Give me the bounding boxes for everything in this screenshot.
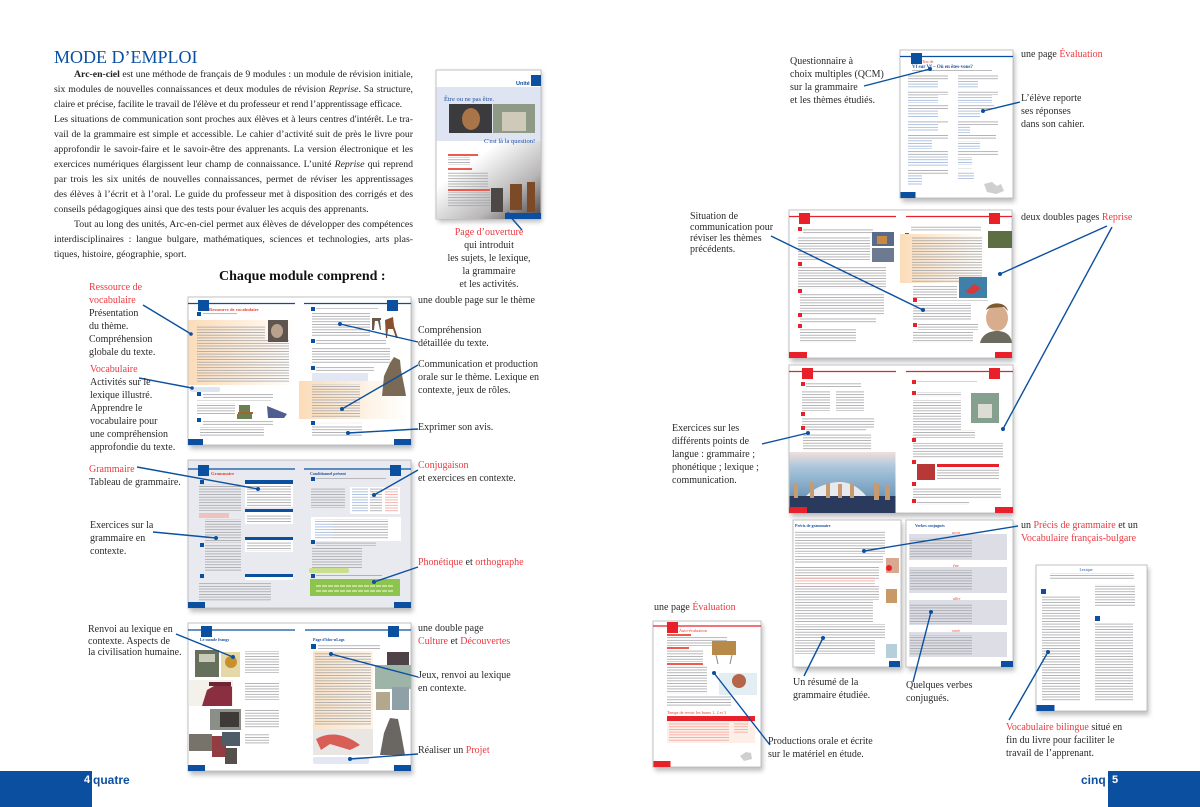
callout: grammaire (89, 464, 181, 488)
intro text block: interdisciplinaires : langue bulgare, mathématiques, sciences et technologies, arts plas- (54, 234, 413, 245)
callout: questionnaire: sur la grammaire (790, 82, 858, 93)
arrow: reprise 1 (1000, 226, 1107, 274)
heading: chaque module comprend: Chaque module comprend : (219, 269, 386, 284)
callout: situation de communication: réviser les thèmes (690, 233, 762, 244)
thumbnail: QCM evaluation page: Test de (922, 59, 934, 64)
dialogue panel (900, 234, 986, 283)
boy photo (986, 305, 1008, 331)
intro text block: approfondir le savoir-faire et le savoir-être des apprenants. La version électronique et les (54, 144, 413, 155)
callout: productions (768, 736, 873, 760)
callout: vocabulaire: Vocabulaire (90, 364, 138, 375)
collage photos (195, 650, 219, 677)
callout: vocabulaire: approfondie du texte. (90, 442, 175, 453)
train and timetable (917, 464, 935, 480)
callout: communication: contexte, jeux de rôles. (418, 385, 510, 396)
thumbnail: conjugated verbs page: être (953, 563, 959, 568)
callout: vocabulaire: lexique illustré. (90, 390, 152, 401)
callout: communication: Communication et production (418, 359, 538, 370)
callout: jeux: Jeux, renvoi au lexique (418, 670, 511, 681)
callout: vocabulaire: une compréhension (90, 429, 168, 440)
intro text block: exercices numériques élargissent leur champ de connaissance. L’unité Reprise qui reprend (54, 159, 413, 170)
callout: quelques verbes: conjugués. (906, 693, 949, 704)
arrow: productions (714, 673, 770, 745)
arrow: situation (771, 236, 923, 310)
callout: grammaire: Grammaire (89, 464, 135, 475)
arrow: vocabulaire bilingue (1009, 652, 1048, 720)
thumbnail: grammar summary page (793, 520, 903, 671)
thumbnail: culture double page: Le monde frangy (200, 637, 229, 642)
page label: quatre: quatre (93, 773, 130, 787)
callout: exercices points de langue: communication. (672, 475, 737, 486)
callout: jeux: en contexte. (418, 683, 466, 694)
callout: résumé: grammaire étudiée. (793, 690, 870, 701)
callout: ressource de vocabulaire: vocabulaire (89, 295, 136, 306)
footer bar: right page number (1108, 771, 1200, 807)
thumbnail: opening page: Unité (516, 81, 530, 87)
callout: productions: sur le matériel en étude. (768, 749, 864, 760)
callout: exercices grammaire: Exercices sur la (90, 520, 153, 531)
callout: exercices grammaire: grammaire en (90, 533, 145, 544)
arrow: verbes (913, 612, 931, 682)
callout: exercices points de langue: phonétique ; lexique ; (672, 462, 759, 473)
intro text block: tiques, histoire, géographie, sport. (54, 249, 186, 260)
callout: renvoi au lexique: contexte. Aspects de (88, 636, 170, 646)
callout: vocabulaire bilingue (1006, 722, 1122, 759)
thumbnail: grammar double page: Conditionnel présent (310, 471, 347, 476)
callout: résumé (793, 677, 870, 701)
page number: right: 5 (1112, 774, 1118, 786)
arrow: communication (342, 365, 418, 409)
intro text block: par trois les six unités de nouvelles connaissances, permet de réviser les apprentissages (54, 174, 413, 185)
thumbnail: evaluation page: Temps de revoir les bases 1, 2 et 3 (667, 710, 726, 716)
thumbnail: Reprise double page 2 (789, 365, 1014, 517)
callout: jeux (418, 670, 511, 694)
thumbnail: culture double page: Page d'bloc-nLogs (313, 637, 345, 642)
thumbnail: conjugated verbs page: Verbes conjugués (915, 523, 945, 528)
arrow: conjugaison (374, 470, 418, 495)
thumbnail: evaluation page: Auto-évaluation (679, 628, 708, 633)
callout: ressource de vocabulaire (89, 282, 155, 358)
thumbnail: grammar summary page: Précis de grammaire (795, 523, 831, 528)
arrow: exercices (153, 532, 216, 538)
callout: ressource de vocabulaire: du thème. (89, 321, 128, 332)
callout: ressource de vocabulaire: Présentation (89, 308, 138, 319)
arrow: reprise 2 (1003, 227, 1112, 429)
intro text block (54, 69, 413, 260)
intro text block: des élèves à l’écrit et à l’oral. Le guide du professeur met à disposition des corrigés et des (54, 189, 413, 200)
arrow: grammaire (137, 467, 258, 489)
callout: communication: orale sur le thème. Lexique en (418, 372, 539, 383)
callout: conjugaison: Conjugaison (418, 460, 469, 471)
thumbnail: bilingual vocabulary page: Lexique (1079, 567, 1093, 572)
callout: culture et découvertes: Culture et Découvertes (418, 636, 510, 647)
callout: vocabulaire bilingue: Vocabulaire bilingue situé en (1006, 722, 1122, 733)
callout: communication (418, 359, 539, 396)
thumbnail: opening page (436, 70, 542, 222)
callout: projet: Réaliser un Projet (418, 745, 490, 756)
callout: situation de communication: précédents. (690, 244, 735, 255)
thumbnail: QCM evaluation page: Vf sur Vf – Où en êtes-vous? (912, 65, 973, 70)
intro text block: Les situations de communication sont proches aux élèves et à leurs centres d'intérêt. Le tra- (54, 114, 413, 125)
page number: left: 4 (84, 774, 90, 786)
callout: ressource de vocabulaire: Ressource de (89, 282, 142, 293)
intro text block: claire et précise, facilite le travail de l'élève et du professeur et rend l’apprentissage efficace. (54, 99, 402, 110)
callout: culture et découvertes: une double page (418, 623, 484, 634)
callout: vocabulaire: Apprendre le (90, 403, 142, 414)
callout: l'élève reporte: ses réponses (1021, 106, 1071, 117)
thumbnail: culture double page (188, 623, 413, 775)
callout: situation de communication (690, 211, 773, 255)
phonetics green box (310, 579, 400, 596)
intro text block: Tout au long des unités, Arc-en-ciel permet aux élèves de développer des compétences (74, 219, 413, 230)
arrow: résumé (804, 638, 823, 676)
callout: page d'ouverture: qui introduit (464, 240, 514, 251)
callout: questionnaire: et les thèmes étudiés. (790, 95, 875, 106)
arrow: l'élève reporte (983, 102, 1020, 111)
callout: page d'ouverture: la grammaire (462, 266, 516, 277)
intro text block: six modules de nouvelles connaissances et deux modules de révision Reprise. Sa structure, (54, 84, 413, 95)
callout: l'élève reporte (1021, 93, 1085, 130)
callout: l'élève reporte: L’élève reporte (1021, 93, 1081, 104)
callout: précis de grammaire: Vocabulaire français-bulgare (1021, 533, 1136, 544)
cruise photo (790, 452, 896, 513)
callout: vocabulaire bilingue: travail de l’apprenant. (1006, 748, 1094, 759)
intro text block: conseils pédagogiques ainsi que des tests pour évaluer les acquis des apprenants. (54, 204, 369, 215)
callout: compréhension (418, 325, 489, 349)
callout: vocabulaire: Activités sur le (90, 377, 151, 388)
callout: page d'ouverture: Page d’ouverture (455, 227, 523, 238)
arrow: renvoi (176, 634, 233, 657)
arrow: vocabulaire (139, 378, 192, 388)
callout: vocabulaire: vocabulaire pour (90, 416, 157, 427)
right column (311, 307, 315, 311)
arrow: précis (864, 526, 1018, 551)
callout: page évaluation: une page Évaluation (1021, 49, 1103, 60)
thumbnail: conjugated verbs page: aller (953, 596, 961, 601)
thumbnail: grammar double page (188, 460, 413, 612)
callout: doubles pages reprise: deux doubles pages Reprise (1021, 212, 1132, 223)
arrow: ressource de vocabulaire (143, 305, 191, 334)
callout: questionnaire (790, 56, 884, 106)
callout: culture et découvertes (418, 623, 510, 647)
arrows: callout leader lines (137, 67, 1112, 761)
callout: page d'ouverture: et les activités. (459, 279, 519, 290)
callout: page d'ouverture: les sujets, le lexique, (447, 253, 531, 264)
callout: quelques verbes (906, 680, 972, 704)
callout: résumé: Un résumé de la (793, 677, 858, 688)
arrow: phonétique (374, 567, 418, 582)
callout: ressource de vocabulaire: globale du texte. (89, 347, 155, 358)
header line (188, 302, 411, 304)
callout: précis de grammaire (1021, 520, 1138, 544)
callout: questionnaire: choix multiples (QCM) (790, 69, 884, 80)
callout: quelques verbes: Quelques verbes (906, 680, 972, 691)
callout: compréhension: Compréhension (418, 325, 481, 336)
arrow: QCM (864, 69, 930, 86)
callout: double page thème: une double page sur le thème (418, 295, 535, 306)
callout: exercices grammaire: contexte. (90, 546, 126, 557)
thumbnail: grammar double page: Grammaire (211, 471, 234, 476)
callout: exercices grammaire (90, 520, 154, 557)
callout: vocabulaire bilingue: fin du livre pour faciliter le (1006, 735, 1115, 746)
callout: exprimer son avis: Exprimer son avis. (418, 422, 493, 433)
callout: grammaire: Tableau de grammaire. (89, 477, 181, 488)
callout: page d'ouverture (447, 227, 531, 290)
callout: compréhension: détaillée du texte. (418, 338, 489, 349)
thumbnail: Reprise double page 1 (789, 210, 1014, 362)
thumbnail: QCM evaluation page (900, 50, 1015, 202)
footer tabs (188, 439, 411, 445)
callout: exercices points de langue: langue : grammaire ; (672, 449, 755, 460)
thumbnail: conjugated verbs page: venir (952, 628, 961, 633)
callout: évaluation bas: une page Évaluation (654, 602, 736, 613)
title: MODE D’EMPLOI (54, 47, 198, 67)
thumbnail: bilingual vocabulary page (1036, 565, 1149, 715)
grammar tables (245, 480, 293, 507)
thumbnail: opening page: Être ou ne pas être. (444, 95, 494, 103)
arrow: exprimer (348, 429, 418, 433)
intro text block: vail de la grammaire est simple et accessible. Le cahier d’activité suit de près le livre pour (54, 129, 413, 140)
callout: situation de communication: communication pour (690, 222, 773, 233)
callout: questionnaire: Questionnaire à (790, 56, 853, 67)
callout: situation de communication: Situation de (690, 211, 738, 222)
callout: exercices points de langue (672, 423, 759, 486)
callout: exercices points de langue: différents points de (672, 436, 749, 447)
thumbnail: vocabulary double page (188, 297, 413, 449)
callout: renvoi au lexique: la civilisation humaine. (88, 647, 182, 658)
thumbnail: opening page: C'est là la question! (484, 138, 535, 145)
arrow: page d'ouverture (508, 214, 522, 230)
callout: phonétique: Phonétique et orthographe (418, 557, 524, 568)
callout: productions: Productions orale et écrite (768, 736, 873, 747)
callout: conjugaison: et exercices en contexte. (418, 473, 516, 484)
thumbnail: vocabulary double page: Ressource de vocabulaire (209, 307, 259, 312)
arrow: projet (350, 754, 418, 759)
intro text block: Arc-en-ciel est une méthode de français de 9 modules : un module de révision initiale, (74, 69, 413, 80)
callout: exercices points de langue: Exercices sur les (672, 423, 739, 434)
callout: vocabulaire (90, 364, 175, 453)
arrow: jeux (331, 654, 418, 677)
callout: précis de grammaire: un Précis de grammaire et un (1021, 520, 1138, 531)
arrow: compréhension (340, 324, 418, 342)
thumbnail: conjugated verbs page: avoir (952, 530, 961, 535)
reading panel (188, 320, 296, 385)
vocabulary section (190, 387, 220, 392)
callout: ressource de vocabulaire: Compréhension (89, 334, 152, 345)
callout: renvoi au lexique: Renvoi au lexique en (88, 624, 173, 635)
footer bar: left page number (0, 771, 92, 807)
thumbnail: evaluation page (653, 621, 763, 771)
callout: renvoi au lexique (88, 624, 182, 658)
page label: cinq: cinq (1081, 773, 1106, 787)
callout: l'élève reporte: dans son cahier. (1021, 119, 1085, 130)
callout: conjugaison (418, 460, 516, 484)
thumbnail: conjugated verbs page (906, 520, 1015, 671)
arrow: exercices points de langue (762, 433, 808, 444)
